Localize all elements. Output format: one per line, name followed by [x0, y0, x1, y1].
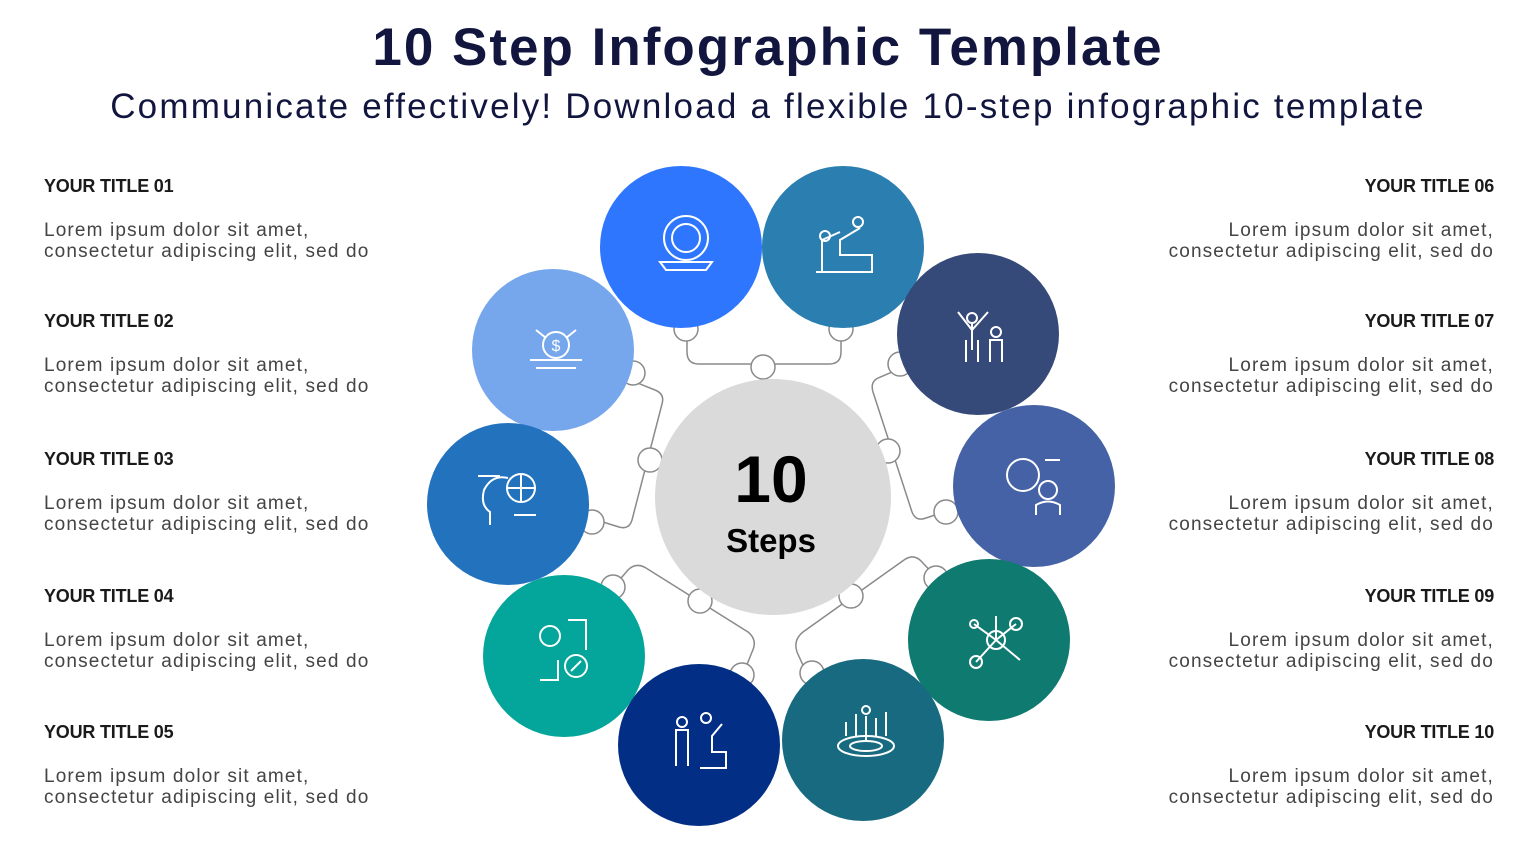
- text block 05: Lorem ipsum dolor sit amet,: [44, 766, 309, 787]
- center circle: 10: [734, 442, 808, 516]
- text block 06: [1169, 176, 1494, 262]
- text block 01: [44, 176, 369, 262]
- step 4: [472, 269, 634, 431]
- step 8: [483, 575, 645, 737]
- step 5: [953, 405, 1115, 567]
- text block 03: Lorem ipsum dolor sit amet,: [44, 493, 309, 514]
- text block 07: consectetur adipiscing elit, sed do: [1169, 376, 1494, 397]
- text block 07: Lorem ipsum dolor sit amet,: [1229, 355, 1494, 376]
- text block 06: consectetur adipiscing elit, sed do: [1169, 241, 1494, 262]
- text block 07: YOUR TITLE 07: [1365, 311, 1494, 331]
- text block 09: consectetur adipiscing elit, sed do: [1169, 651, 1494, 672]
- text block 06: YOUR TITLE 06: [1365, 176, 1494, 196]
- text block 04: YOUR TITLE 04: [44, 586, 173, 606]
- text block 03: [44, 449, 369, 535]
- text block 08: consectetur adipiscing elit, sed do: [1169, 514, 1494, 535]
- text block 01: Lorem ipsum dolor sit amet,: [44, 220, 309, 241]
- center circle: Steps: [726, 522, 816, 559]
- text block 05: YOUR TITLE 05: [44, 722, 173, 742]
- text block 10: YOUR TITLE 10: [1365, 722, 1494, 742]
- text block 05: [44, 722, 369, 808]
- step 1: [600, 166, 762, 328]
- text block 02: Lorem ipsum dolor sit amet,: [44, 355, 309, 376]
- text block 09: [1169, 586, 1494, 672]
- text block 09: Lorem ipsum dolor sit amet,: [1229, 630, 1494, 651]
- text block 02: consectetur adipiscing elit, sed do: [44, 376, 369, 397]
- text block 06: Lorem ipsum dolor sit amet,: [1229, 220, 1494, 241]
- text block 01: consectetur adipiscing elit, sed do: [44, 241, 369, 262]
- connectors: [580, 317, 958, 687]
- text block 05: consectetur adipiscing elit, sed do: [44, 787, 369, 808]
- text block 08: Lorem ipsum dolor sit amet,: [1229, 493, 1494, 514]
- text block 03: consectetur adipiscing elit, sed do: [44, 514, 369, 535]
- text block 02: [44, 311, 369, 397]
- text block 07: [1169, 311, 1494, 397]
- step 6: [427, 423, 589, 585]
- text block 04: consectetur adipiscing elit, sed do: [44, 651, 369, 672]
- text block 04: [44, 586, 369, 672]
- text block 08: [1169, 449, 1494, 535]
- center circle: [655, 379, 891, 615]
- text block 03: YOUR TITLE 03: [44, 449, 173, 469]
- text block 08: YOUR TITLE 08: [1365, 449, 1494, 469]
- step 10: [782, 659, 944, 821]
- step 3: [897, 253, 1059, 415]
- subtitle: Communicate effectively! Download a flexible 10-step infographic template: [110, 87, 1426, 126]
- step 4: $: [552, 338, 561, 355]
- text block 10: [1169, 722, 1494, 808]
- text block 09: YOUR TITLE 09: [1365, 586, 1494, 606]
- step 9: [618, 664, 780, 826]
- title: 10 Step Infographic Template: [372, 18, 1164, 77]
- step 2: [762, 166, 924, 328]
- text block 10: Lorem ipsum dolor sit amet,: [1229, 766, 1494, 787]
- text block 04: Lorem ipsum dolor sit amet,: [44, 630, 309, 651]
- text block 02: YOUR TITLE 02: [44, 311, 173, 331]
- text block 01: YOUR TITLE 01: [44, 176, 173, 196]
- text block 10: consectetur adipiscing elit, sed do: [1169, 787, 1494, 808]
- step 7: [908, 559, 1070, 721]
- step circles: [427, 166, 1115, 826]
